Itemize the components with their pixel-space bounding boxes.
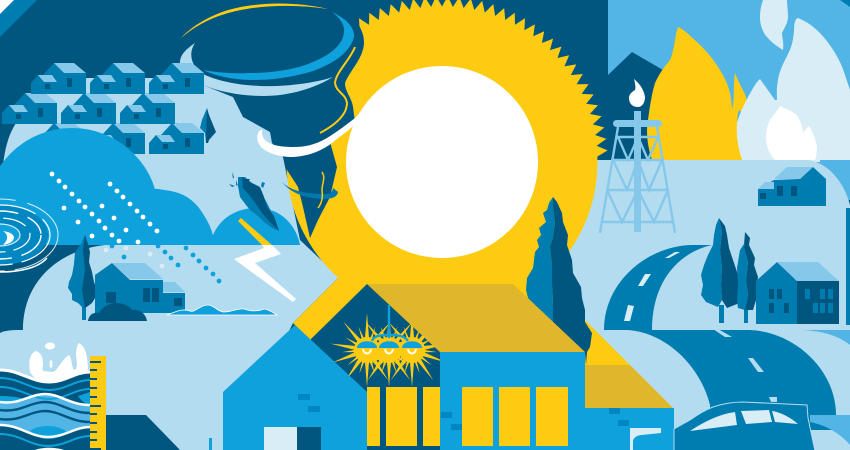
house: left bright wing — [223, 325, 367, 450]
oil derrick — [600, 79, 675, 233]
right house — [756, 262, 839, 324]
sun: serrated yellow disc with roof below — [286, 0, 673, 408]
flooded house — [68, 235, 277, 321]
navy shoreline — [0, 245, 105, 333]
bush — [88, 303, 147, 321]
door — [264, 427, 297, 450]
tree: center conifer — [526, 197, 592, 365]
trees by road — [701, 218, 758, 323]
house body — [95, 263, 185, 313]
whirlpool and navy shoreline — [0, 199, 105, 333]
yellow roof band — [293, 265, 673, 408]
bricks — [298, 394, 310, 400]
sun teeth — [354, 0, 608, 157]
derrick frame — [600, 127, 675, 233]
small far house — [758, 167, 826, 206]
ground: right light panel — [560, 160, 850, 450]
car windows — [690, 410, 798, 431]
bright lens upper — [0, 392, 90, 405]
wave lines — [0, 370, 90, 450]
lightning bolt — [234, 218, 296, 302]
storm clouds — [0, 128, 300, 245]
tree beside house — [68, 235, 98, 320]
wildfire flames — [647, 0, 850, 162]
flood water — [167, 305, 277, 315]
windows left — [769, 289, 789, 313]
chandelier — [330, 305, 449, 387]
second tree — [737, 232, 758, 323]
cord and arms — [372, 305, 408, 341]
yellow squiggle low — [318, 172, 324, 208]
house roofs — [112, 263, 163, 279]
swirl ring low — [282, 182, 338, 199]
mountain silhouette — [608, 52, 663, 160]
navy rooftop bottom left — [106, 415, 180, 450]
tree: small — [200, 108, 216, 143]
flood gauge ruler — [90, 356, 106, 450]
flame: drifting drop — [760, 0, 788, 50]
whirlpool rings — [0, 205, 48, 265]
derrick flame — [629, 79, 645, 107]
house: right bright wing — [440, 352, 674, 450]
car — [674, 402, 815, 450]
windows right — [805, 289, 833, 313]
crescent: light — [180, 43, 333, 96]
road: foreground — [627, 329, 836, 430]
utility post — [209, 438, 212, 450]
flame: pale left — [737, 18, 850, 162]
flame: white core — [766, 106, 817, 160]
tornado — [170, 3, 372, 238]
ochre roof shadow — [585, 365, 673, 408]
tornado funnel — [170, 5, 364, 238]
yellow swirl arc — [180, 3, 328, 39]
splash — [29, 342, 90, 384]
windows — [462, 387, 493, 446]
house windows — [106, 288, 182, 306]
debris — [229, 172, 279, 231]
water body — [0, 370, 90, 450]
road dashes lower — [713, 329, 777, 402]
storm surge water — [0, 342, 90, 450]
sky wedges right — [802, 160, 850, 445]
navy gable — [311, 284, 440, 450]
road dashes upper — [624, 252, 680, 321]
house: gable windows — [367, 387, 440, 446]
road: curving back — [604, 245, 712, 330]
rain dots — [50, 172, 221, 283]
ground: left light panel — [0, 78, 339, 450]
crescent: bright — [203, 12, 354, 80]
panel: wildfire sky — [608, 0, 850, 200]
corner stripe — [0, 0, 37, 37]
glow bursts — [330, 313, 449, 387]
ochre roof — [367, 284, 585, 352]
corner sliver top right — [840, 0, 850, 7]
houses: suburb cluster — [2, 63, 204, 154]
lamp shades — [357, 341, 422, 348]
yellow squiggle — [320, 47, 355, 133]
bricks — [441, 412, 452, 418]
flame: yellow — [647, 27, 748, 160]
sun: white centre — [346, 66, 538, 258]
big tree — [701, 218, 743, 323]
white wind band — [257, 100, 372, 157]
building edge right — [846, 208, 850, 325]
garage window — [630, 428, 661, 450]
bright lens low — [30, 426, 68, 439]
wave band sky — [0, 394, 90, 437]
lamp bulbs — [363, 349, 416, 354]
